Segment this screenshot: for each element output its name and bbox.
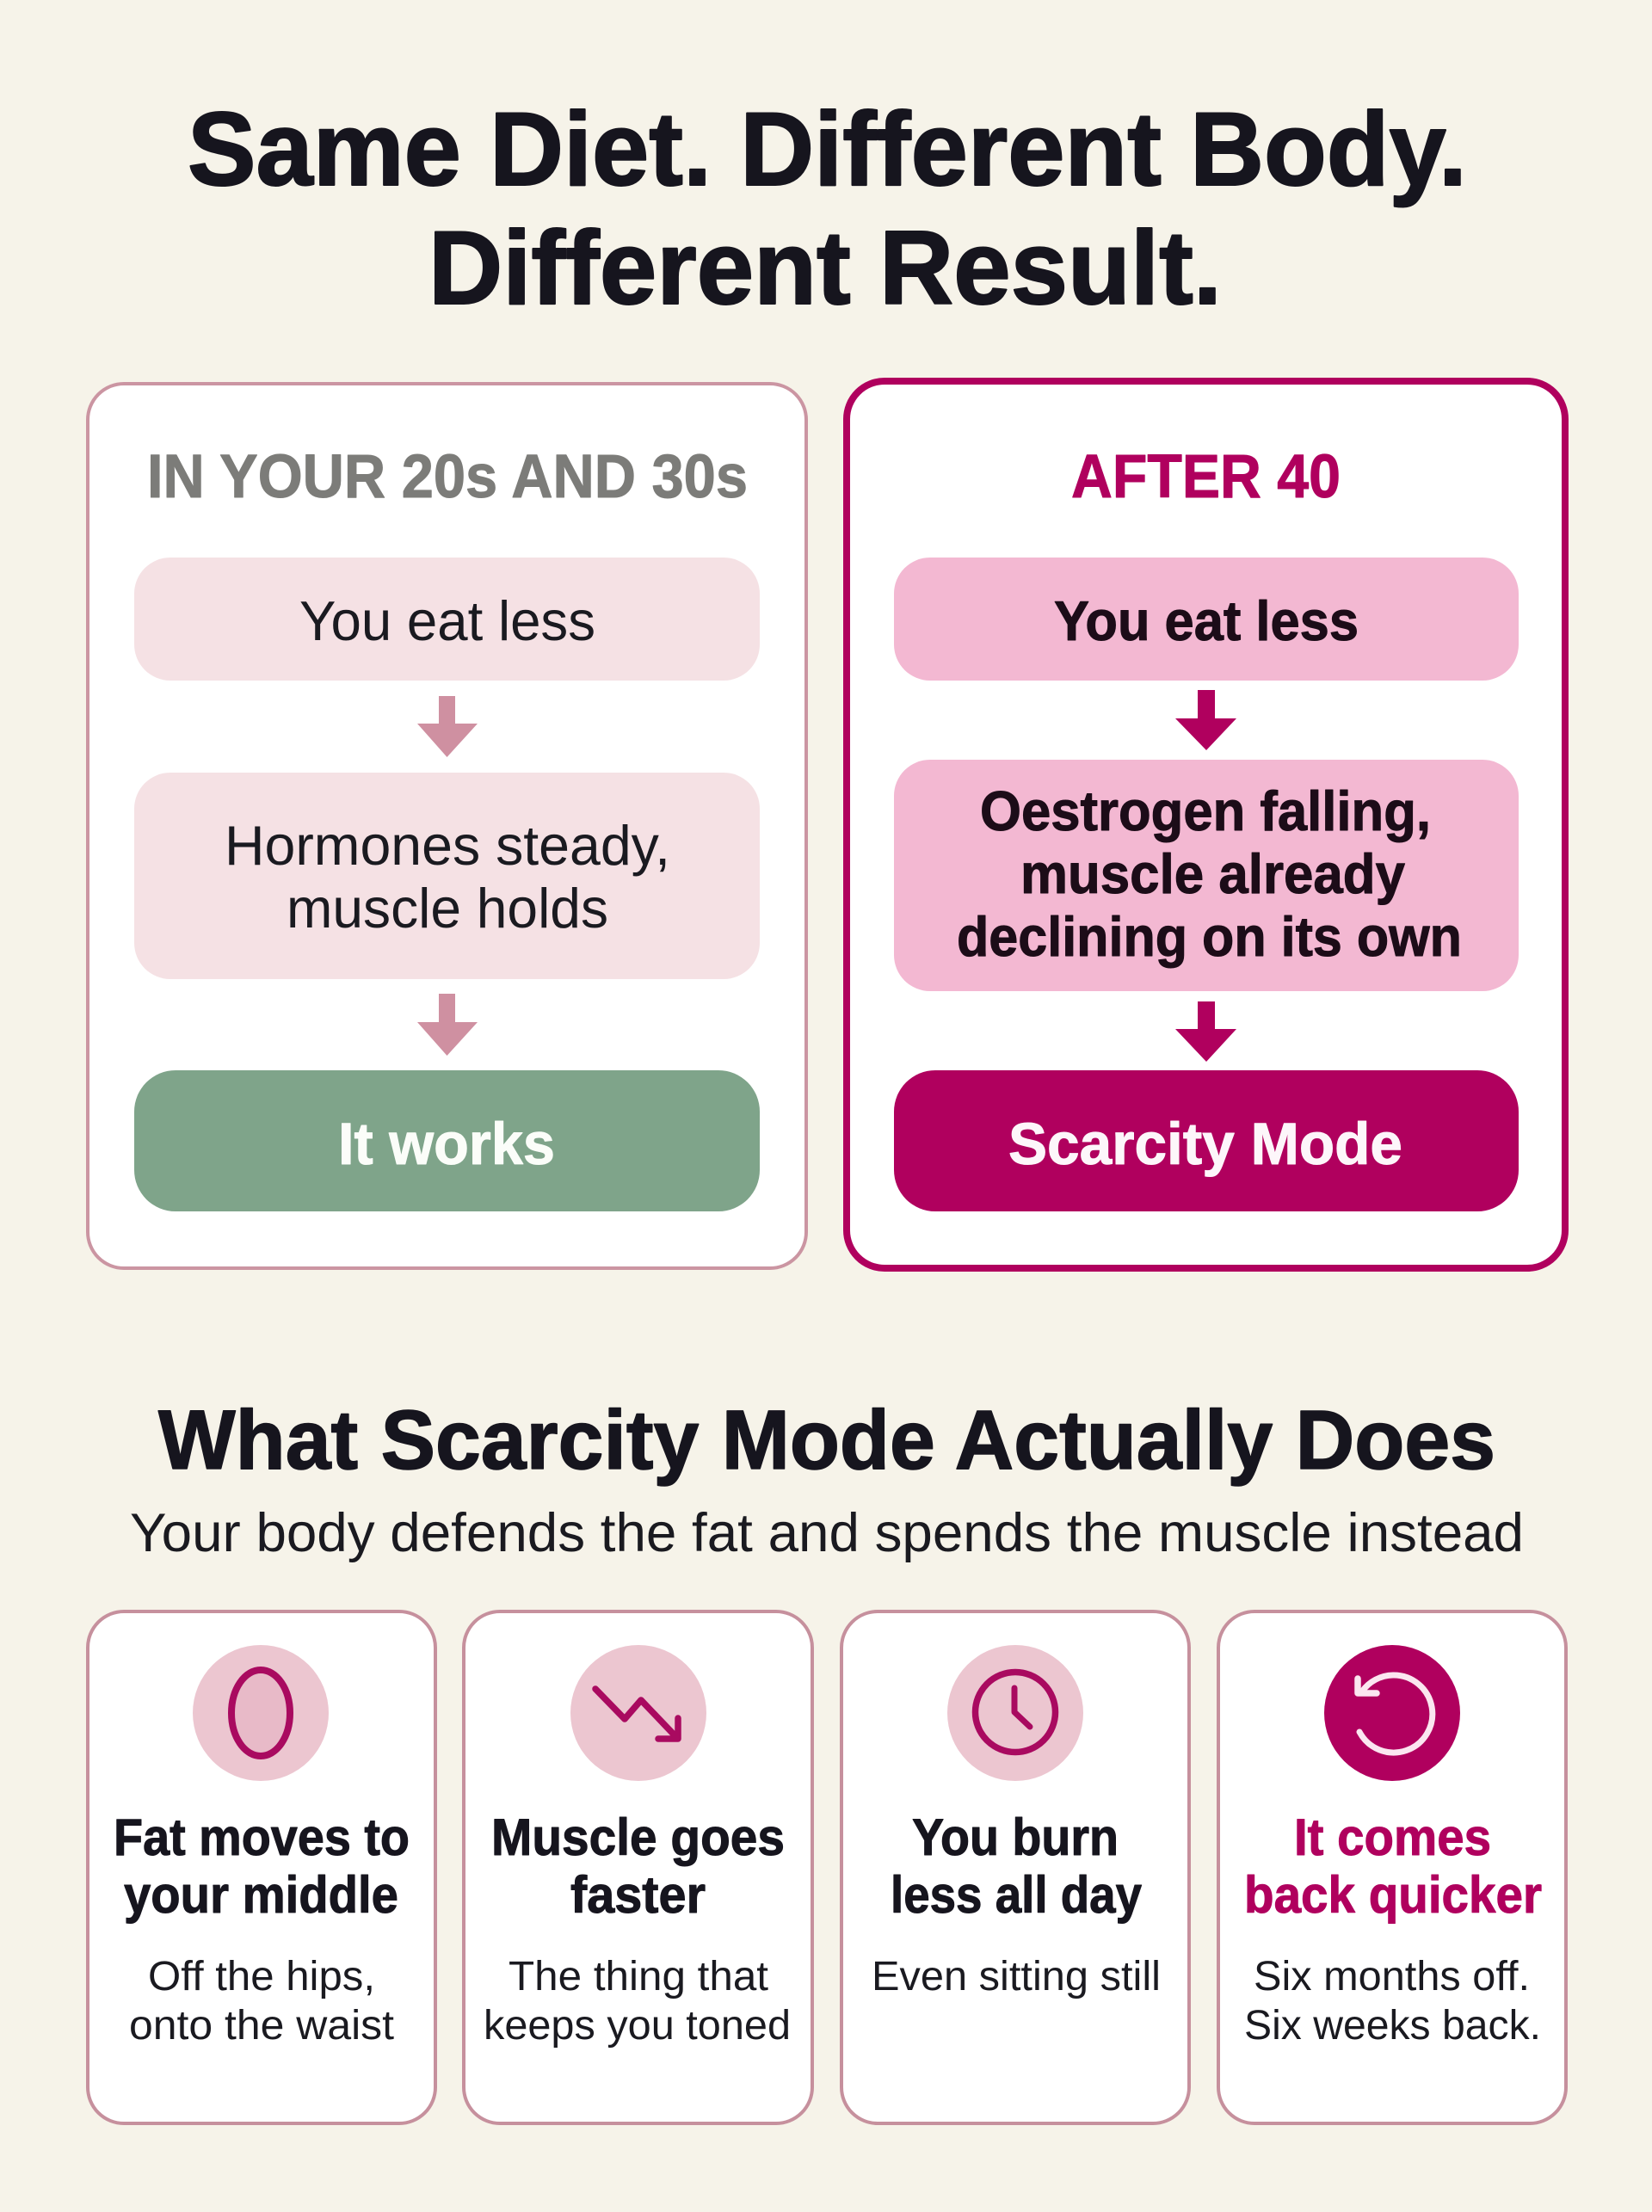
step: it works: It works	[338, 1111, 555, 1177]
icon: clock	[947, 1645, 1083, 1781]
title: Different Result.	[428, 209, 1222, 326]
step: you eat less	[134, 558, 760, 681]
step: you eat less: You eat less	[1054, 589, 1359, 652]
card title: Muscle goes	[491, 1808, 785, 1866]
card text: Six weeks back.	[1244, 2003, 1541, 2049]
card: it comes back quicker	[1218, 1611, 1566, 2123]
card text: keeps you toned	[484, 2003, 791, 2049]
step: scarcity mode	[894, 1070, 1519, 1211]
icon: oval waist	[193, 1645, 329, 1781]
panel: in your 20s and 30s	[88, 384, 806, 1268]
card text	[484, 1954, 791, 2049]
panel heading: in your 20s and 30s: IN YOUR 20s AND 30s	[147, 443, 748, 511]
card title: faster	[570, 1866, 706, 1924]
step: hormones steady: Hormones steady,	[225, 814, 670, 877]
title	[188, 90, 1467, 326]
step: you eat less	[894, 558, 1519, 681]
step: hormones steady: muscle holds	[287, 877, 608, 940]
step: oestrogen falling: Oestrogen falling,	[980, 779, 1431, 842]
card title	[114, 1808, 410, 1924]
step: scarcity mode: Scarcity Mode	[1008, 1111, 1402, 1177]
card text: Six months off.	[1254, 1954, 1530, 1999]
panel: after 40	[847, 381, 1565, 1268]
card: fat moves to your middle	[88, 1611, 435, 2123]
step: hormones steady	[134, 773, 760, 979]
step: oestrogen falling: declining on its own	[957, 905, 1462, 968]
arrow: down	[1175, 690, 1236, 750]
section subheading: Your body defends the fat and spends the muscle instead	[130, 1503, 1524, 1563]
icon: return arrow	[1324, 1645, 1460, 1781]
card text: Even sitting still	[872, 1954, 1161, 1999]
card title: back quicker	[1244, 1866, 1542, 1924]
card title: your middle	[124, 1866, 398, 1924]
card title	[491, 1808, 785, 1924]
card title: It comes	[1294, 1808, 1491, 1866]
arrow: down	[417, 696, 478, 757]
card text	[129, 1954, 394, 2049]
section heading: What Scarcity Mode Actually Does	[158, 1393, 1495, 1487]
arrow: down	[417, 994, 478, 1056]
card text: onto the waist	[129, 2003, 394, 2049]
step: you eat less: You eat less	[299, 589, 595, 652]
card text	[1244, 1954, 1541, 2049]
arrow: down	[1175, 1001, 1236, 1062]
card text: The thing that	[509, 1954, 768, 1999]
card: you burn less all day	[841, 1611, 1189, 2123]
step: it works	[134, 1070, 760, 1211]
card title: Fat moves to	[114, 1808, 410, 1866]
step: oestrogen falling	[894, 760, 1519, 991]
card text: Off the hips,	[148, 1954, 375, 1999]
step: oestrogen falling: muscle already	[1020, 842, 1405, 905]
icon: downward trend arrow	[570, 1645, 706, 1781]
title: Same Diet. Different Body.	[188, 90, 1467, 207]
card title: You burn	[912, 1808, 1119, 1866]
card: muscle goes faster	[464, 1611, 812, 2123]
card title	[891, 1808, 1143, 1924]
card title: less all day	[891, 1866, 1143, 1924]
card title	[1244, 1808, 1542, 1924]
panel heading: after 40: AFTER 40	[1071, 443, 1341, 511]
